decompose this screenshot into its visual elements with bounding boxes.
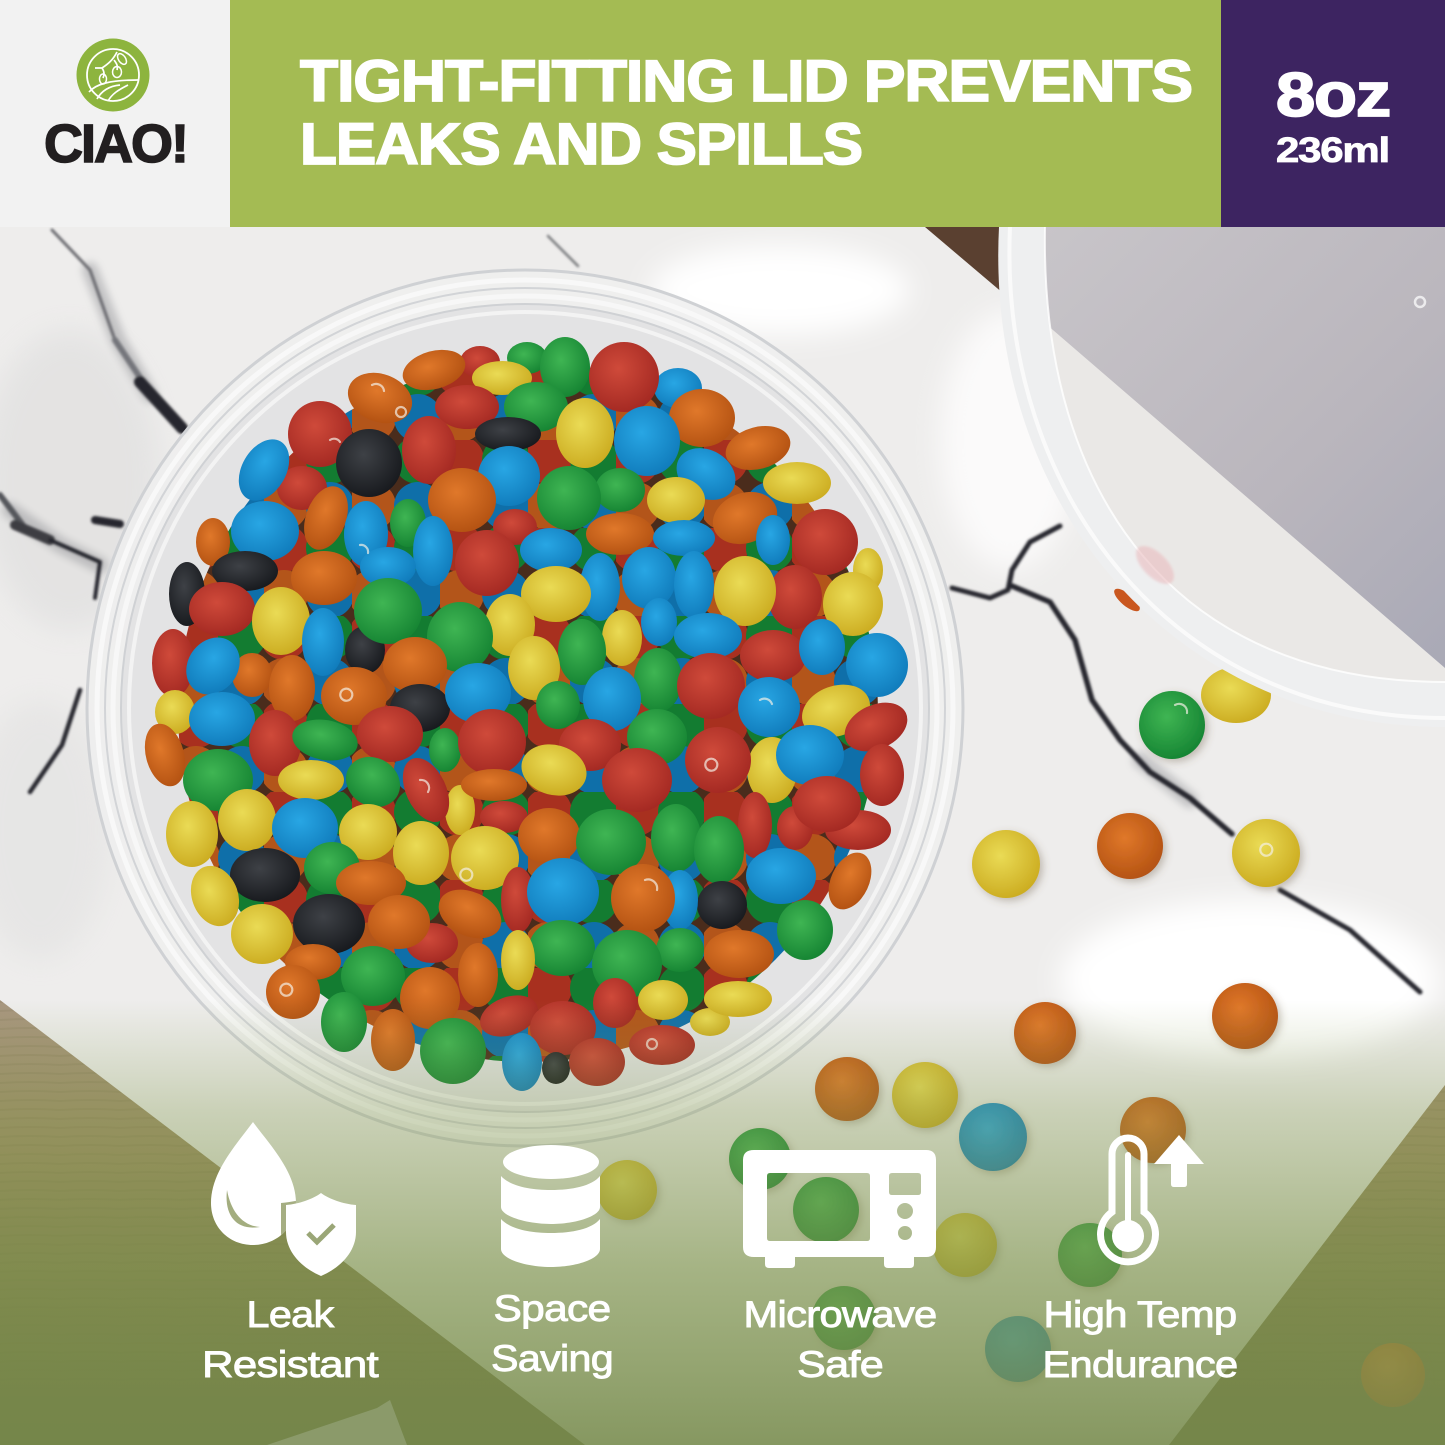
label: Saving (491, 1338, 613, 1379)
headline (300, 49, 1192, 177)
yellow candy under lid (1201, 667, 1271, 723)
candy sugar specks (280, 384, 1272, 1049)
scattered candies (597, 691, 1425, 1407)
label: Leak (246, 1294, 335, 1335)
headline: TIGHT-FITTING LID PREVENTS (300, 49, 1192, 114)
capacity 236ml: 236ml (1276, 131, 1389, 170)
icon: microwave (743, 1150, 936, 1268)
plastic lid (998, 227, 1445, 727)
logo panel (0, 0, 230, 227)
lid interior over table (1046, 227, 1445, 668)
size panel (1221, 0, 1445, 227)
logo wordmark: CIAO! (44, 114, 187, 174)
feature: leak resistant (202, 1122, 380, 1385)
round clear bowl (87, 270, 963, 1146)
red candy sliver (1111, 585, 1143, 615)
icon: drop and shield (211, 1122, 361, 1281)
label: Safe (797, 1344, 883, 1385)
green fade overlay (0, 1000, 1445, 1445)
label: High Temp (1044, 1294, 1237, 1335)
candies in bowl (138, 337, 915, 1091)
label: Endurance (1042, 1344, 1238, 1385)
icon: stacked containers (501, 1145, 600, 1267)
label: Microwave (744, 1294, 936, 1335)
pale object at bottom edge (267, 1400, 407, 1445)
capacity 8oz: 8oz (1276, 61, 1390, 130)
feature: high temp endurance (1042, 1135, 1238, 1385)
label: Space (494, 1288, 610, 1329)
headline: LEAKS AND SPILLS (300, 112, 862, 177)
headline panel (230, 0, 1221, 227)
feature: space saving (491, 1145, 613, 1379)
lid interior over board (1052, 329, 1445, 681)
lid rim (998, 227, 1445, 727)
feature: microwave safe (743, 1150, 936, 1385)
icon: logo olive branch (76, 38, 150, 112)
marble veins (0, 230, 1420, 992)
label: Resistant (202, 1344, 380, 1385)
icon: thermometer with up arrow (1100, 1135, 1204, 1262)
